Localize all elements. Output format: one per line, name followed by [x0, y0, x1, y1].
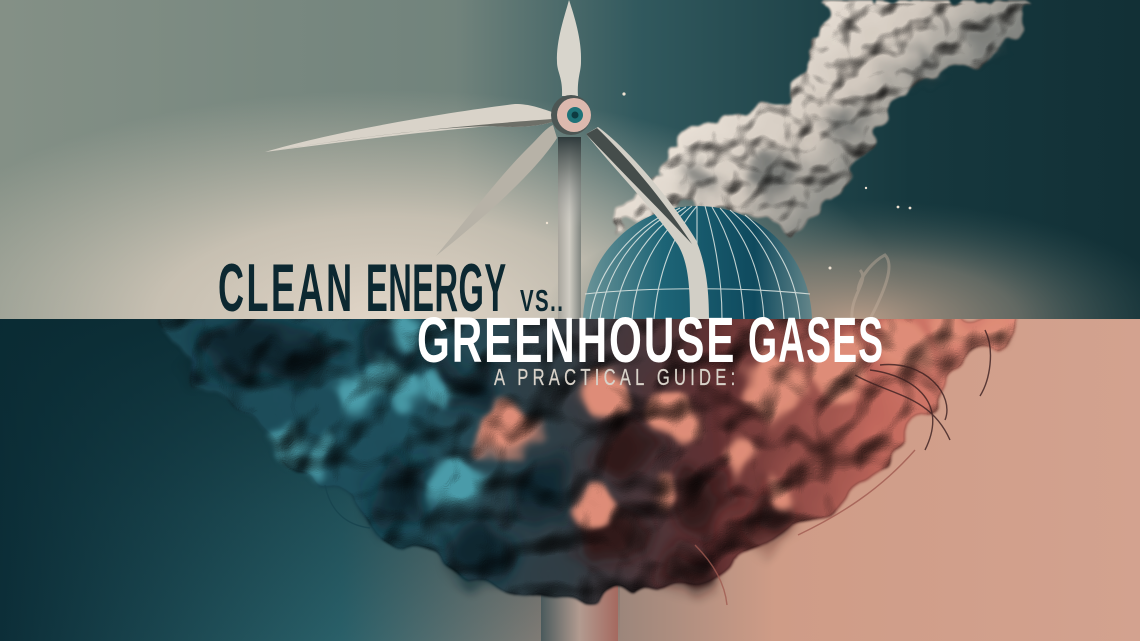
icon: wind turbine — [265, 0, 709, 319]
panel: sky with clean energy scene — [0, 0, 1140, 319]
dark billows — [190, 317, 568, 582]
icon: glass dome — [583, 206, 812, 319]
emissions cloud — [150, 310, 1020, 605]
highlighted billows: salmon — [477, 312, 1006, 523]
panel: lower half with emissions cloud — [0, 310, 1140, 641]
subtitle: A PRACTICAL GUIDE: — [494, 365, 735, 391]
title: greenhouse gases: GREENHOUSE — [417, 305, 734, 376]
smokestack — [541, 585, 618, 641]
blade: left — [265, 104, 552, 152]
ink tendrils — [325, 330, 990, 605]
title: greenhouse gases: GASES — [748, 306, 883, 377]
hub — [551, 95, 591, 135]
sparks — [546, 92, 911, 270]
title: clean energy — [218, 250, 506, 326]
blade: lower left — [436, 125, 557, 256]
title: clean energy: CLEAN — [218, 250, 352, 326]
wisp of smoke — [852, 255, 889, 319]
smoke plume — [612, 0, 1030, 238]
tower — [558, 137, 581, 319]
title: vs: VS.. — [520, 283, 563, 318]
blade: lower right — [586, 127, 709, 319]
title: clean energy: ENERGY — [366, 251, 506, 326]
highlighted billows: teal — [271, 315, 484, 506]
title: greenhouse gases — [417, 305, 883, 377]
blade: top — [557, 0, 581, 96]
